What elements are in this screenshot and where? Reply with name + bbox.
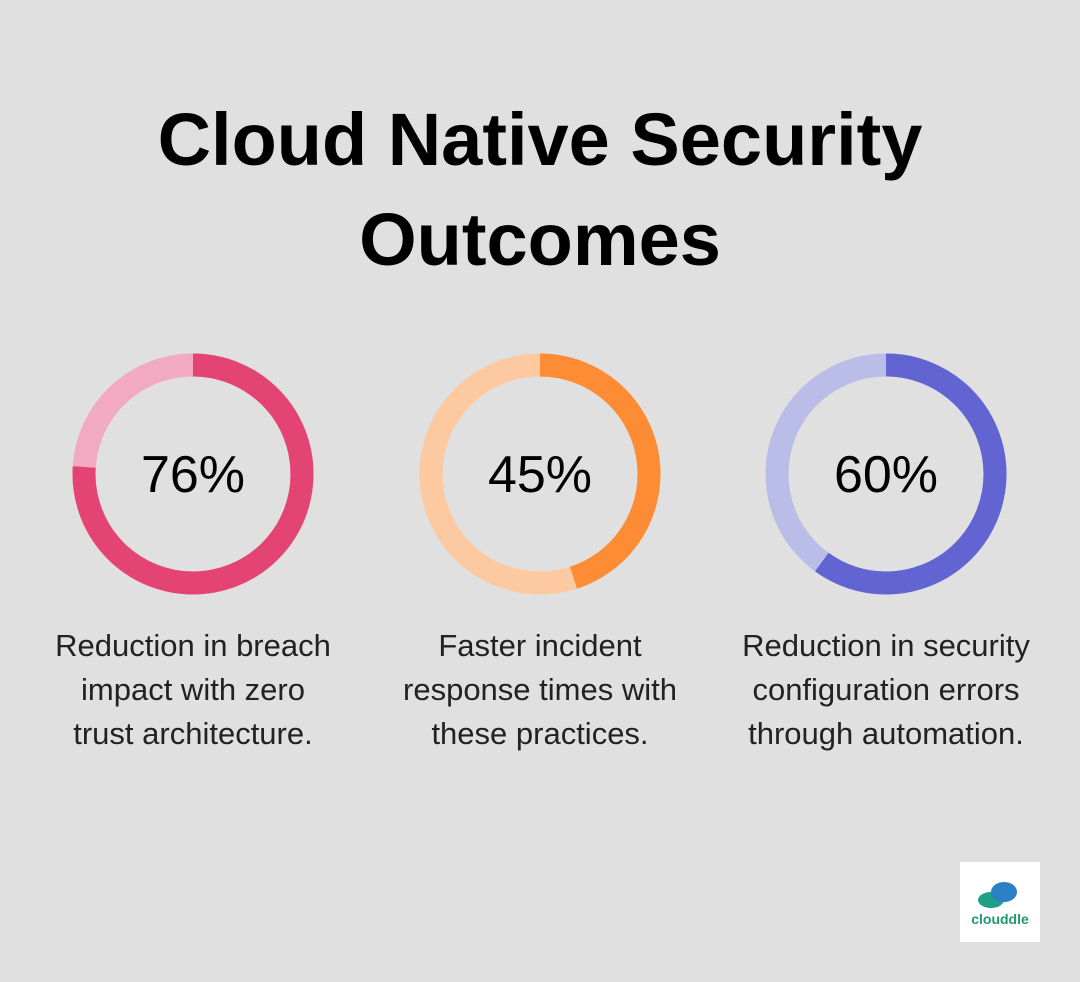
text: breach: trust architecture. (73, 716, 313, 751)
text: breach: impact with zero (81, 672, 305, 707)
logo: clouddle (971, 911, 1029, 927)
logo (960, 862, 1040, 942)
donut: 60% (777, 365, 995, 583)
text: config: through automation. (748, 716, 1024, 751)
donut: 76%: 76% (141, 446, 245, 504)
title: Cloud Native Security (158, 98, 922, 181)
title (158, 98, 922, 281)
text: incident: these practices. (431, 716, 649, 751)
text: config: Reduction in security (742, 628, 1030, 663)
text: incident (403, 628, 677, 751)
donut: 60%: 60% (834, 446, 938, 504)
donut: 76% (84, 365, 302, 583)
text: breach (55, 628, 331, 751)
donut: 45% (431, 365, 649, 583)
donut: 45%: 45% (488, 446, 592, 504)
text: config (742, 628, 1030, 751)
text: config: configuration errors (752, 672, 1020, 707)
text: incident: response times with (403, 672, 677, 707)
text: incident: Faster incident (438, 628, 642, 663)
title: Outcomes (359, 198, 721, 281)
text: breach: Reduction in breach (55, 628, 331, 663)
